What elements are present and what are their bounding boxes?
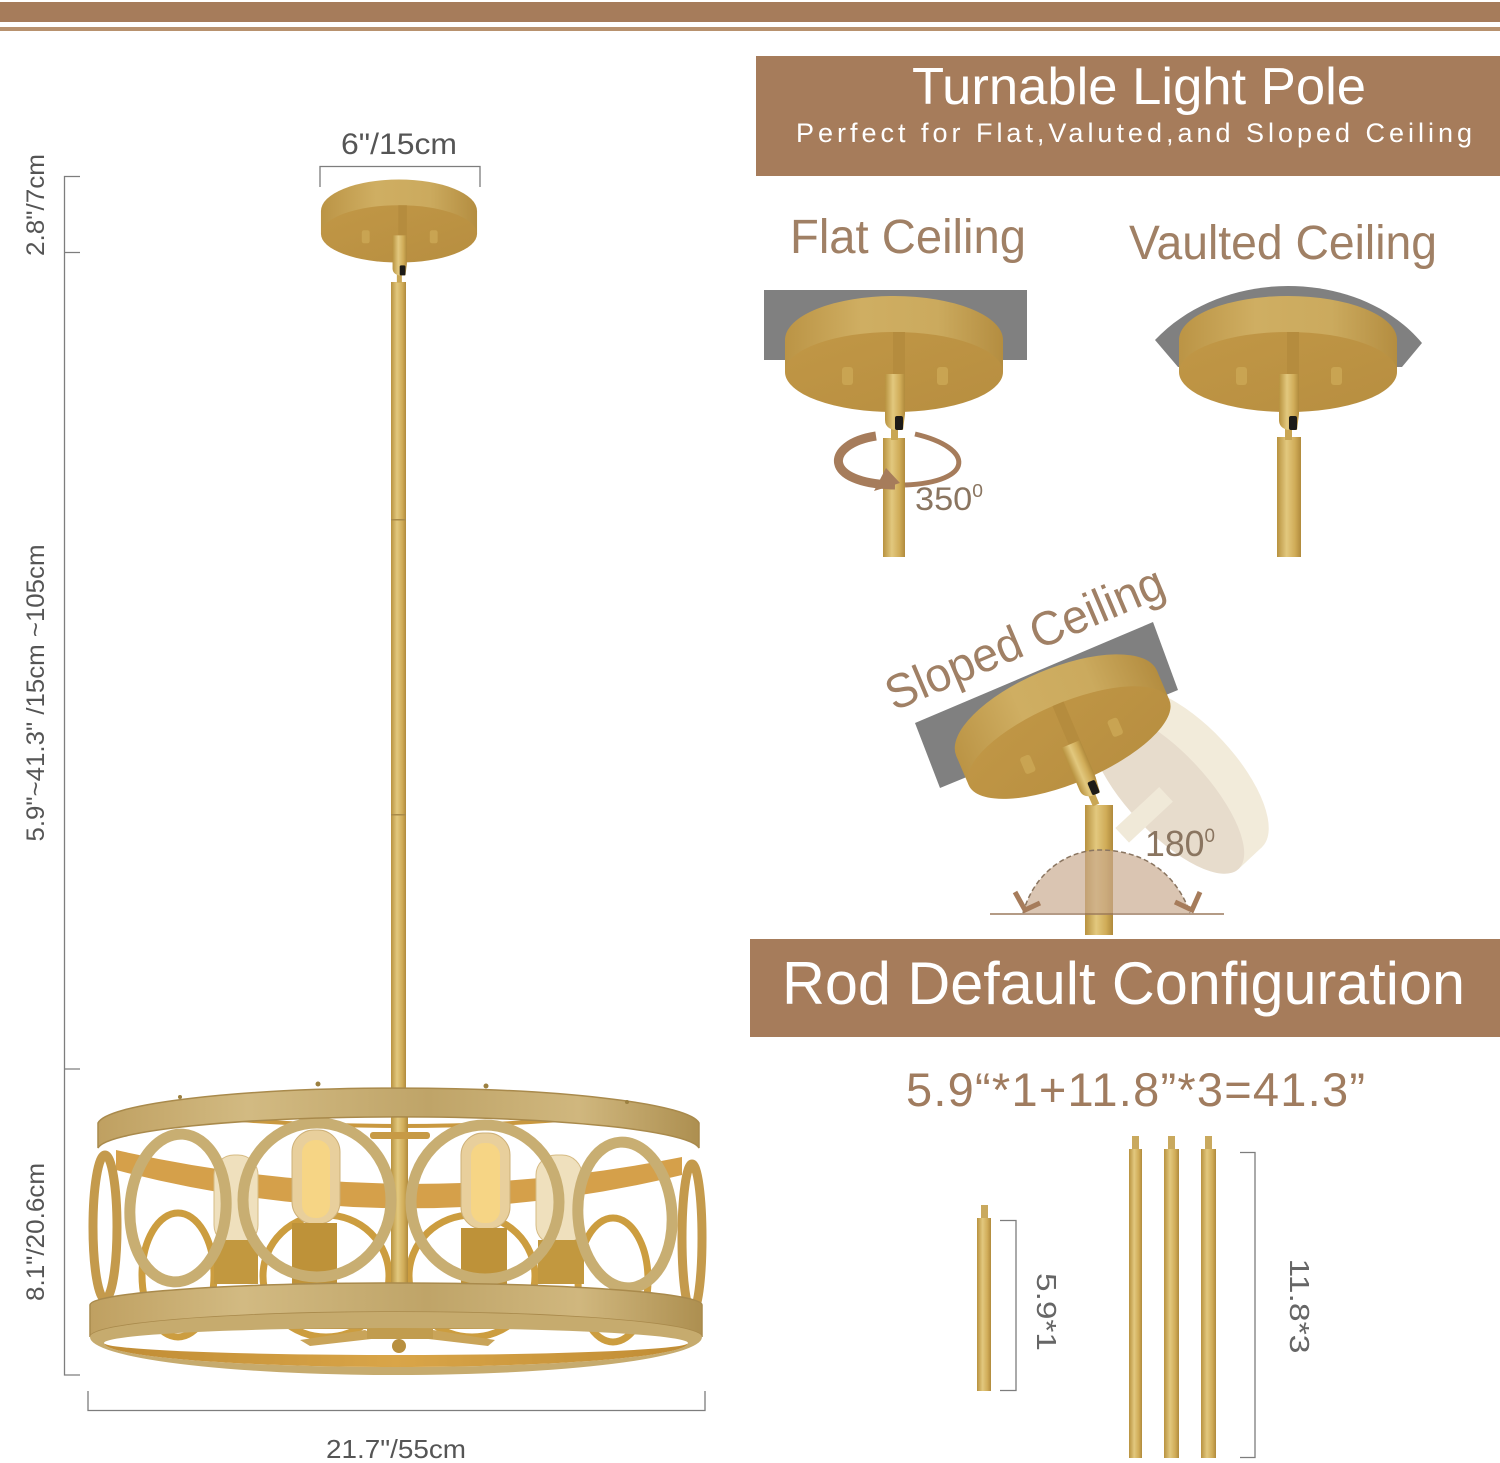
chandelier drum shade bbox=[90, 1082, 702, 1375]
flat ceiling diagram bbox=[764, 290, 1027, 557]
dome dashed outline bbox=[1023, 850, 1190, 913]
vaulted ceiling rod bbox=[1277, 437, 1301, 557]
inner gold surface bbox=[104, 1343, 688, 1367]
chandelier canopy bbox=[321, 179, 477, 283]
back of shade bbox=[116, 1150, 682, 1208]
top band bbox=[98, 1088, 699, 1148]
canopy bbox=[785, 296, 1003, 440]
sloped ceiling block bbox=[915, 622, 1178, 788]
ghost canopy bbox=[1050, 664, 1294, 911]
rotation arrow bbox=[838, 434, 959, 491]
bottom rim bbox=[90, 1312, 702, 1375]
rod formula: 5.9“*1+11.8”*3=41.3” bbox=[906, 1063, 1365, 1116]
short rod bracket bbox=[1000, 1220, 1016, 1390]
heading: flat ceiling: Flat Ceiling bbox=[790, 211, 1026, 264]
chandelier rod bbox=[391, 282, 406, 1088]
vaulted ceiling diagram bbox=[1155, 286, 1422, 557]
top band rivets bbox=[178, 1082, 629, 1104]
180 degree dome bbox=[1023, 850, 1190, 913]
lower band bbox=[90, 1283, 702, 1337]
banner title: Turnable Light Pole bbox=[912, 58, 1366, 116]
vaulted ceiling block bbox=[1155, 286, 1422, 367]
banner subtitle: Perfect for Flat,Valuted,and Sloped Ceiling bbox=[796, 118, 1472, 148]
long rods bbox=[1129, 1136, 1216, 1458]
short rod label: 5.9*1 bbox=[1031, 1273, 1062, 1351]
long rods label: 11.8*3 bbox=[1284, 1258, 1315, 1354]
angle label: 0 bbox=[1205, 826, 1215, 847]
long rods bracket bbox=[1240, 1152, 1255, 1458]
baseline bbox=[990, 913, 1224, 915]
dimension label: rod length: 5.9"~41.3" /15cm ~105cm bbox=[22, 544, 50, 842]
swing arrows bbox=[1015, 892, 1200, 910]
bottom cross arms and finial bbox=[212, 1316, 588, 1353]
dimension label: canopy width: 6"/15cm bbox=[341, 128, 457, 161]
flat ceiling block bbox=[764, 290, 1027, 360]
decorative front rings bbox=[93, 1123, 702, 1312]
canopy bbox=[939, 630, 1196, 848]
top decorative band bbox=[0, 2, 1500, 31]
heading: sloped ceiling: Sloped Ceiling bbox=[877, 556, 1172, 721]
banner: rod default configuration bbox=[750, 939, 1500, 1037]
dimension lines bbox=[64, 166, 705, 1410]
banner title: Rod Default Configuration bbox=[782, 950, 1465, 1017]
canopy bbox=[1179, 296, 1397, 440]
rotation label: 350 bbox=[915, 481, 968, 517]
light bulbs and sockets bbox=[214, 1130, 584, 1285]
dimension label: canopy height: 2.8"/7cm bbox=[22, 154, 50, 256]
flat ceiling rod bbox=[883, 438, 905, 557]
heading: vaulted ceiling: Vaulted Ceiling bbox=[1129, 217, 1437, 270]
banner: turnable light pole bbox=[756, 56, 1500, 176]
sloped rod bbox=[1085, 805, 1113, 935]
rotation label: 0 bbox=[972, 481, 983, 501]
centre stem bbox=[370, 1110, 430, 1290]
dimension label: shade height: 8.1"/20.6cm bbox=[22, 1163, 50, 1301]
short rod bbox=[977, 1205, 991, 1391]
angle label: 180 bbox=[1145, 823, 1205, 864]
sloped ceiling diagram bbox=[877, 556, 1294, 935]
